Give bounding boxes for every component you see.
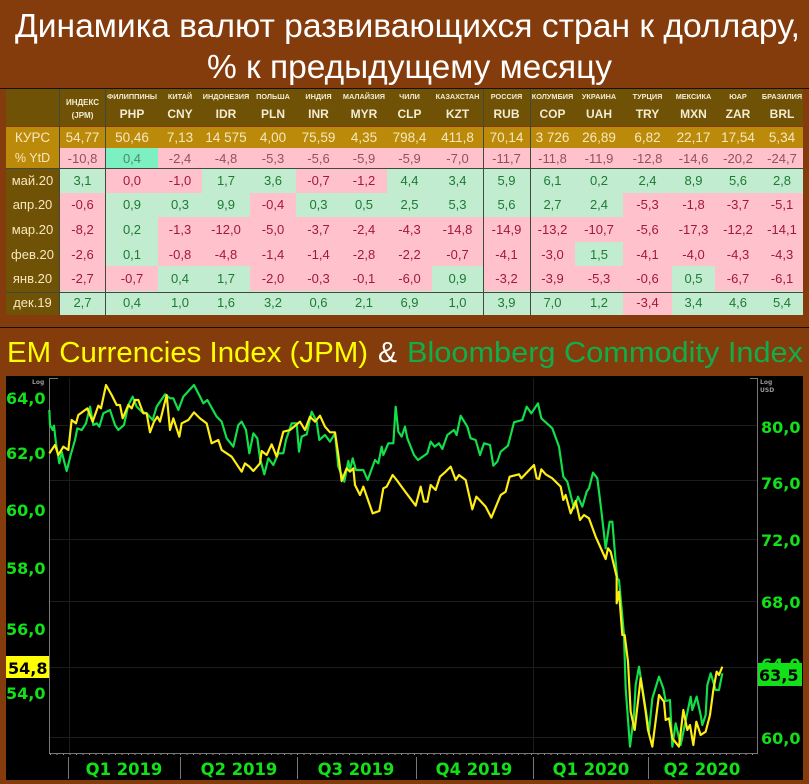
table: currency dynamics: -0,6 (71, 197, 94, 212)
table: currency dynamics: -14,1 (767, 222, 797, 237)
table: currency dynamics: -5,9 (398, 150, 421, 166)
table: currency dynamics: -12,0 (211, 222, 241, 237)
table: currency dynamics: -11,9 (585, 150, 613, 166)
table: currency dynamics: 0,3 (309, 197, 328, 212)
table: currency dynamics: INR (308, 107, 329, 121)
table: currency dynamics: МЕКСИКА (676, 92, 711, 101)
current value: EM index: 54,8 (8, 659, 47, 678)
table: currency dynamics: -5,3 (262, 150, 284, 166)
right axis labels: 68,0 (761, 593, 800, 612)
right axis labels: 72,0 (761, 531, 800, 550)
table: currency dynamics: -2,2 (398, 247, 421, 262)
table: currency dynamics: 6,9 (400, 295, 419, 310)
table: currency dynamics: -5,3 (588, 271, 610, 286)
table: currency dynamics: 5,6 (497, 197, 516, 212)
table: currency dynamics: -4,8 (215, 150, 237, 166)
table: currency dynamics: 0,6 (309, 295, 328, 310)
current value: commodity index: 63,5 (759, 666, 798, 685)
table: currency dynamics (0, 88, 809, 317)
table: currency dynamics: -2,6 (71, 247, 94, 262)
table: currency dynamics: 50,46 (115, 130, 149, 145)
table: currency dynamics: май.20 (12, 173, 53, 188)
table: currency dynamics: -14,8 (443, 222, 472, 237)
table: currency dynamics: КИТАЙ (168, 92, 192, 101)
table: currency dynamics: 3,4 (684, 295, 703, 310)
table: currency dynamics: ПОЛЬША (256, 92, 290, 101)
table: currency dynamics: 1,2 (590, 295, 608, 310)
table: currency dynamics: 3,9 (497, 295, 516, 310)
table: currency dynamics: 75,59 (302, 130, 335, 145)
table: currency dynamics: 1,6 (217, 295, 235, 310)
table: currency dynamics: 2,5 (400, 197, 419, 212)
table: currency dynamics: CLP (398, 107, 422, 121)
time axis labels: Q2 2020 (664, 760, 740, 779)
table: currency dynamics: апр.20 (13, 197, 52, 212)
table: currency dynamics: -10,8 (68, 150, 97, 166)
time axis labels: Q4 2019 (436, 760, 512, 779)
table: currency dynamics: -1,3 (169, 222, 191, 237)
table: currency dynamics: 2,4 (590, 197, 608, 212)
table: currency dynamics: 3 726 (536, 130, 569, 145)
table: currency dynamics: % YtD (15, 151, 50, 165)
table: currency dynamics: 798,4 (393, 130, 426, 145)
table: currency dynamics: 26,89 (582, 130, 616, 145)
left axis labels: 60,0 (6, 501, 45, 520)
left axis labels: 64,0 (6, 389, 45, 408)
table: currency dynamics: БРАЗИЛИЯ (762, 92, 802, 101)
table: currency dynamics: -2,8 (353, 247, 375, 262)
table: currency dynamics: КУРС (15, 130, 50, 145)
section heading: chart legend: EM Currencies Index (JPM) (7, 337, 368, 369)
table: currency dynamics: ИНДОНЕЗИЯ (203, 92, 249, 101)
table: currency dynamics: 5,9 (497, 173, 516, 188)
section heading: chart legend (7, 337, 804, 369)
table: currency dynamics: UAH (586, 107, 612, 121)
table: currency dynamics: 1,5 (590, 247, 608, 262)
table: currency dynamics: TRY (636, 107, 659, 121)
right axis labels: 76,0 (761, 474, 800, 493)
table: currency dynamics: PHP (120, 107, 144, 121)
table: currency dynamics: 1,7 (217, 271, 235, 286)
table: currency dynamics: RUB (494, 107, 520, 121)
table: currency dynamics: -8,2 (71, 222, 94, 237)
left axis labels: 58,0 (6, 559, 45, 578)
table: currency dynamics: 2,7 (73, 295, 92, 310)
line: EM Currencies Index (49, 385, 722, 747)
table: currency dynamics: 0,0 (123, 173, 141, 188)
table: currency dynamics: РОССИЯ (491, 92, 522, 101)
table: currency dynamics: УКРАИНА (582, 92, 616, 101)
table: currency dynamics: -4,0 (682, 247, 705, 262)
table: currency dynamics: 5,34 (769, 130, 795, 145)
table: currency dynamics: -0,1 (353, 271, 375, 286)
table: currency dynamics: -6,1 (771, 271, 793, 286)
table: currency dynamics: 7,0 (543, 295, 562, 310)
table: currency dynamics: 1,7 (217, 173, 235, 188)
table: currency dynamics: 2,7 (543, 197, 562, 212)
table: currency dynamics: -4,3 (398, 222, 421, 237)
table: currency dynamics: MYR (351, 107, 377, 121)
table: currency dynamics: 3,6 (264, 173, 282, 188)
table: currency dynamics: -6,7 (727, 271, 749, 286)
table: currency dynamics: -3,7 (727, 197, 749, 212)
table: currency dynamics: -2,7 (71, 271, 94, 286)
table: currency dynamics: -7,0 (446, 150, 469, 166)
log scale labels: Log (760, 379, 772, 386)
table: currency dynamics: дек.19 (13, 295, 52, 310)
table: currency dynamics: -12,2 (723, 222, 753, 237)
time axis labels: Q1 2019 (86, 760, 162, 779)
table: currency dynamics: -5,3 (636, 197, 659, 212)
table: currency dynamics: -3,7 (307, 222, 330, 237)
table: currency dynamics: -0,7 (446, 247, 469, 262)
table: currency dynamics: -0,8 (169, 247, 191, 262)
table: currency dynamics: 1,0 (171, 295, 189, 310)
table: currency dynamics: ИНДИЯ (305, 92, 332, 101)
table: currency dynamics: 2,8 (773, 173, 791, 188)
table: currency dynamics: CNY (167, 107, 193, 121)
table: currency dynamics: 0,5 (355, 197, 373, 212)
table: currency dynamics: 4,35 (351, 130, 377, 145)
log scale labels: Log (32, 379, 44, 386)
table: currency dynamics: 0,4 (123, 150, 141, 166)
table: currency dynamics: -0,4 (262, 197, 284, 212)
table: currency dynamics: 4,4 (400, 173, 419, 188)
table: currency dynamics: -4,8 (215, 247, 237, 262)
table: currency dynamics: 5,6 (729, 173, 747, 188)
table: currency dynamics: -14,6 (679, 150, 708, 166)
table: currency dynamics: KZT (446, 107, 469, 121)
table: currency dynamics: 0,5 (684, 271, 703, 286)
table: currency dynamics: -3,9 (541, 271, 564, 286)
table: currency dynamics: -13,2 (538, 222, 567, 237)
table: currency dynamics: ЮАР (729, 92, 747, 101)
table: currency dynamics: COP (539, 107, 566, 121)
table: currency dynamics: -5,1 (771, 197, 793, 212)
table: currency dynamics: -0,7 (121, 271, 143, 286)
table: currency dynamics: 70,14 (490, 130, 523, 145)
line: Bloomberg Commodity Index (49, 385, 722, 747)
log scale labels (32, 379, 774, 394)
table: currency dynamics: ФИЛИППИНЫ (107, 92, 157, 101)
left axis labels: 56,0 (6, 620, 45, 639)
table: currency dynamics: -0,6 (636, 271, 659, 286)
table: currency dynamics: -5,6 (636, 222, 659, 237)
table: currency dynamics: 8,9 (684, 173, 703, 188)
right axis labels: 60,0 (761, 729, 800, 748)
axes (50, 378, 758, 779)
table: currency dynamics: PLN (261, 107, 285, 121)
table: currency dynamics: -11,8 (538, 150, 567, 166)
table: currency dynamics: -2,4 (169, 150, 191, 166)
log scale labels: USD (760, 387, 774, 394)
table: currency dynamics: 4,00 (260, 130, 286, 145)
table: currency dynamics: BRL (770, 107, 794, 121)
table: currency dynamics: 5,3 (448, 197, 467, 212)
table: currency dynamics: 17,54 (721, 130, 755, 145)
table: currency dynamics: -1,0 (169, 173, 191, 188)
table: currency dynamics: янв.20 (13, 271, 52, 286)
table: currency dynamics: -5,6 (307, 150, 330, 166)
time axis labels: Q3 2019 (318, 760, 394, 779)
table: currency dynamics: 3,4 (448, 173, 467, 188)
table: currency dynamics: -5,9 (353, 150, 375, 166)
table: currency dynamics: -4,1 (636, 247, 659, 262)
time axis labels: Q1 2020 (553, 760, 629, 779)
table: currency dynamics: -4,3 (771, 247, 793, 262)
table: currency dynamics: -6,0 (398, 271, 421, 286)
table: currency dynamics: -20,2 (723, 150, 753, 166)
table: currency dynamics: 1,0 (448, 295, 467, 310)
table: currency dynamics: -1,4 (307, 247, 330, 262)
right axis labels: 80,0 (761, 418, 800, 437)
table: currency dynamics: -2,0 (262, 271, 284, 286)
left axis labels: 54,0 (6, 684, 45, 703)
left axis labels (6, 389, 45, 703)
table: currency dynamics: 54,77 (66, 130, 99, 145)
table: currency dynamics: MXN (680, 107, 707, 121)
table: currency dynamics: -0,3 (307, 271, 330, 286)
table: currency dynamics: -24,7 (767, 150, 797, 166)
table: currency dynamics: 0,2 (590, 173, 608, 188)
table: currency dynamics: -10,7 (584, 222, 614, 237)
table: currency dynamics: 9,9 (217, 197, 235, 212)
table: currency dynamics: 0,3 (171, 197, 189, 212)
table: currency dynamics: КОЛУМБИЯ (532, 92, 573, 101)
time axis labels: Q2 2019 (201, 760, 277, 779)
table: currency dynamics: 0,9 (123, 197, 141, 212)
table: currency dynamics: 6,82 (634, 130, 661, 145)
table: currency dynamics: -3,2 (495, 271, 518, 286)
table: currency dynamics: -1,2 (353, 173, 375, 188)
table: currency dynamics: -17,3 (679, 222, 708, 237)
section heading: chart legend: & (378, 337, 397, 369)
table: currency dynamics: -3,0 (541, 247, 564, 262)
right axis labels (761, 418, 800, 748)
table: currency dynamics: мар.20 (12, 222, 53, 237)
title (15, 7, 800, 85)
table: currency dynamics: 2,1 (355, 295, 373, 310)
table: currency dynamics: 0,1 (123, 247, 141, 262)
table: currency dynamics: 2,4 (638, 173, 657, 188)
table: currency dynamics: -4,1 (495, 247, 518, 262)
table: currency dynamics: 6,1 (543, 173, 562, 188)
title: Динамика валют развивающихся стран к доллару, (15, 7, 800, 44)
table: currency dynamics: -1,4 (262, 247, 284, 262)
table: currency dynamics: 0,4 (123, 295, 141, 310)
table: currency dynamics: (JPM) (72, 111, 93, 120)
section heading: chart legend: Bloomberg Commodity Index (407, 337, 804, 369)
table: currency dynamics: -1,8 (682, 197, 705, 212)
table: currency dynamics: 3,1 (73, 173, 92, 188)
table: currency dynamics: -11,7 (492, 150, 521, 166)
table: currency dynamics: -14,9 (492, 222, 521, 237)
table: currency dynamics: -12,8 (633, 150, 662, 166)
table: currency dynamics: -0,7 (307, 173, 330, 188)
title: % к предыдущему месяцу (207, 48, 612, 85)
left axis labels: 62,0 (6, 444, 45, 463)
table: currency dynamics: 0,4 (171, 271, 189, 286)
table: currency dynamics: 4,6 (729, 295, 747, 310)
right axis labels: 64,0 (761, 655, 800, 674)
table: currency dynamics: ТУРЦИЯ (633, 92, 662, 101)
table: currency dynamics: IDR (216, 107, 236, 121)
table: currency dynamics: фев.20 (11, 247, 54, 262)
table: currency dynamics: -5,0 (262, 222, 284, 237)
table: currency dynamics: 411,8 (441, 130, 474, 145)
table: currency dynamics: -3,4 (636, 295, 659, 310)
table: currency dynamics: ИНДЕКС (66, 98, 99, 107)
table: currency dynamics: КАЗАХСТАН (436, 92, 479, 101)
time axis labels (86, 760, 740, 779)
table: currency dynamics: 0,2 (123, 222, 141, 237)
table: currency dynamics: -2,4 (353, 222, 375, 237)
table: currency dynamics: -4,3 (727, 247, 749, 262)
table: currency dynamics: МАЛАЙЗИЯ (343, 92, 385, 101)
table: currency dynamics: 5,4 (773, 295, 791, 310)
table: currency dynamics: 7,13 (167, 130, 193, 145)
table: currency dynamics: 3,2 (264, 295, 282, 310)
table: currency dynamics: ZAR (726, 107, 750, 121)
table: currency dynamics: 14 575 (205, 130, 247, 145)
table: currency dynamics: 22,17 (677, 130, 710, 145)
table: currency dynamics: 0,9 (448, 271, 467, 286)
table: currency dynamics: ЧИЛИ (399, 92, 420, 101)
